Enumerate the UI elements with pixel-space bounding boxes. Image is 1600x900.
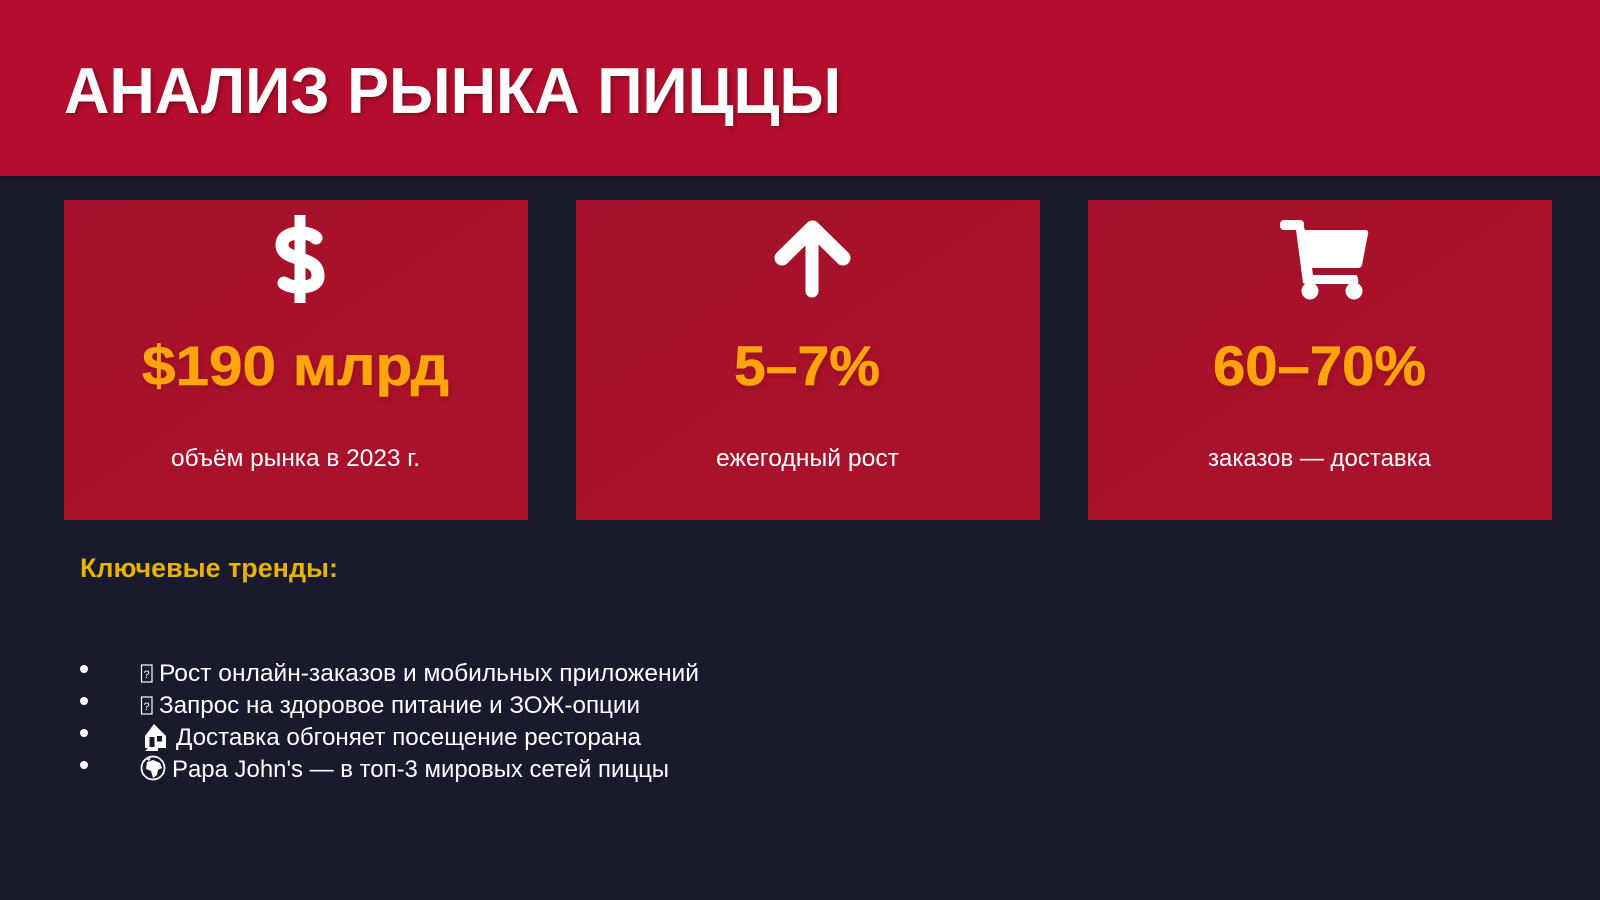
value: 60–70% <box>1213 334 1426 397</box>
label: ежегодный рост <box>716 445 899 472</box>
value: 5–7% <box>734 334 880 397</box>
item: healthy food: Запрос на здоровое питание и ЗОЖ-опции <box>159 692 640 719</box>
icon: dollar <box>282 215 318 303</box>
item: healthy food: ? <box>144 701 150 713</box>
item: online orders: ? <box>144 669 150 681</box>
title: АНАЛИЗ РЫНКА ПИЦЦЫ <box>64 54 841 127</box>
item: delivery: Доставка обгоняет посещение ресторана <box>176 724 642 751</box>
header band <box>0 0 1600 176</box>
icon: arrow up <box>782 228 843 291</box>
item: online orders: Рост онлайн-заказов и мобильных приложений <box>159 660 699 687</box>
list: trends <box>80 660 699 783</box>
panel: annual growth <box>576 200 1040 520</box>
item: Papa John's: Papa John's — в топ-3 мировых сетей пиццы <box>172 756 669 783</box>
value: $190 млрд <box>142 334 449 397</box>
panel: delivery share <box>1088 200 1552 520</box>
icon: cart <box>1280 220 1368 300</box>
label: объём рынка в 2023 г. <box>171 445 420 472</box>
panel: market size <box>64 200 528 520</box>
label: заказов — доставка <box>1208 445 1432 472</box>
heading: key trends: Ключевые тренды: <box>80 553 338 583</box>
